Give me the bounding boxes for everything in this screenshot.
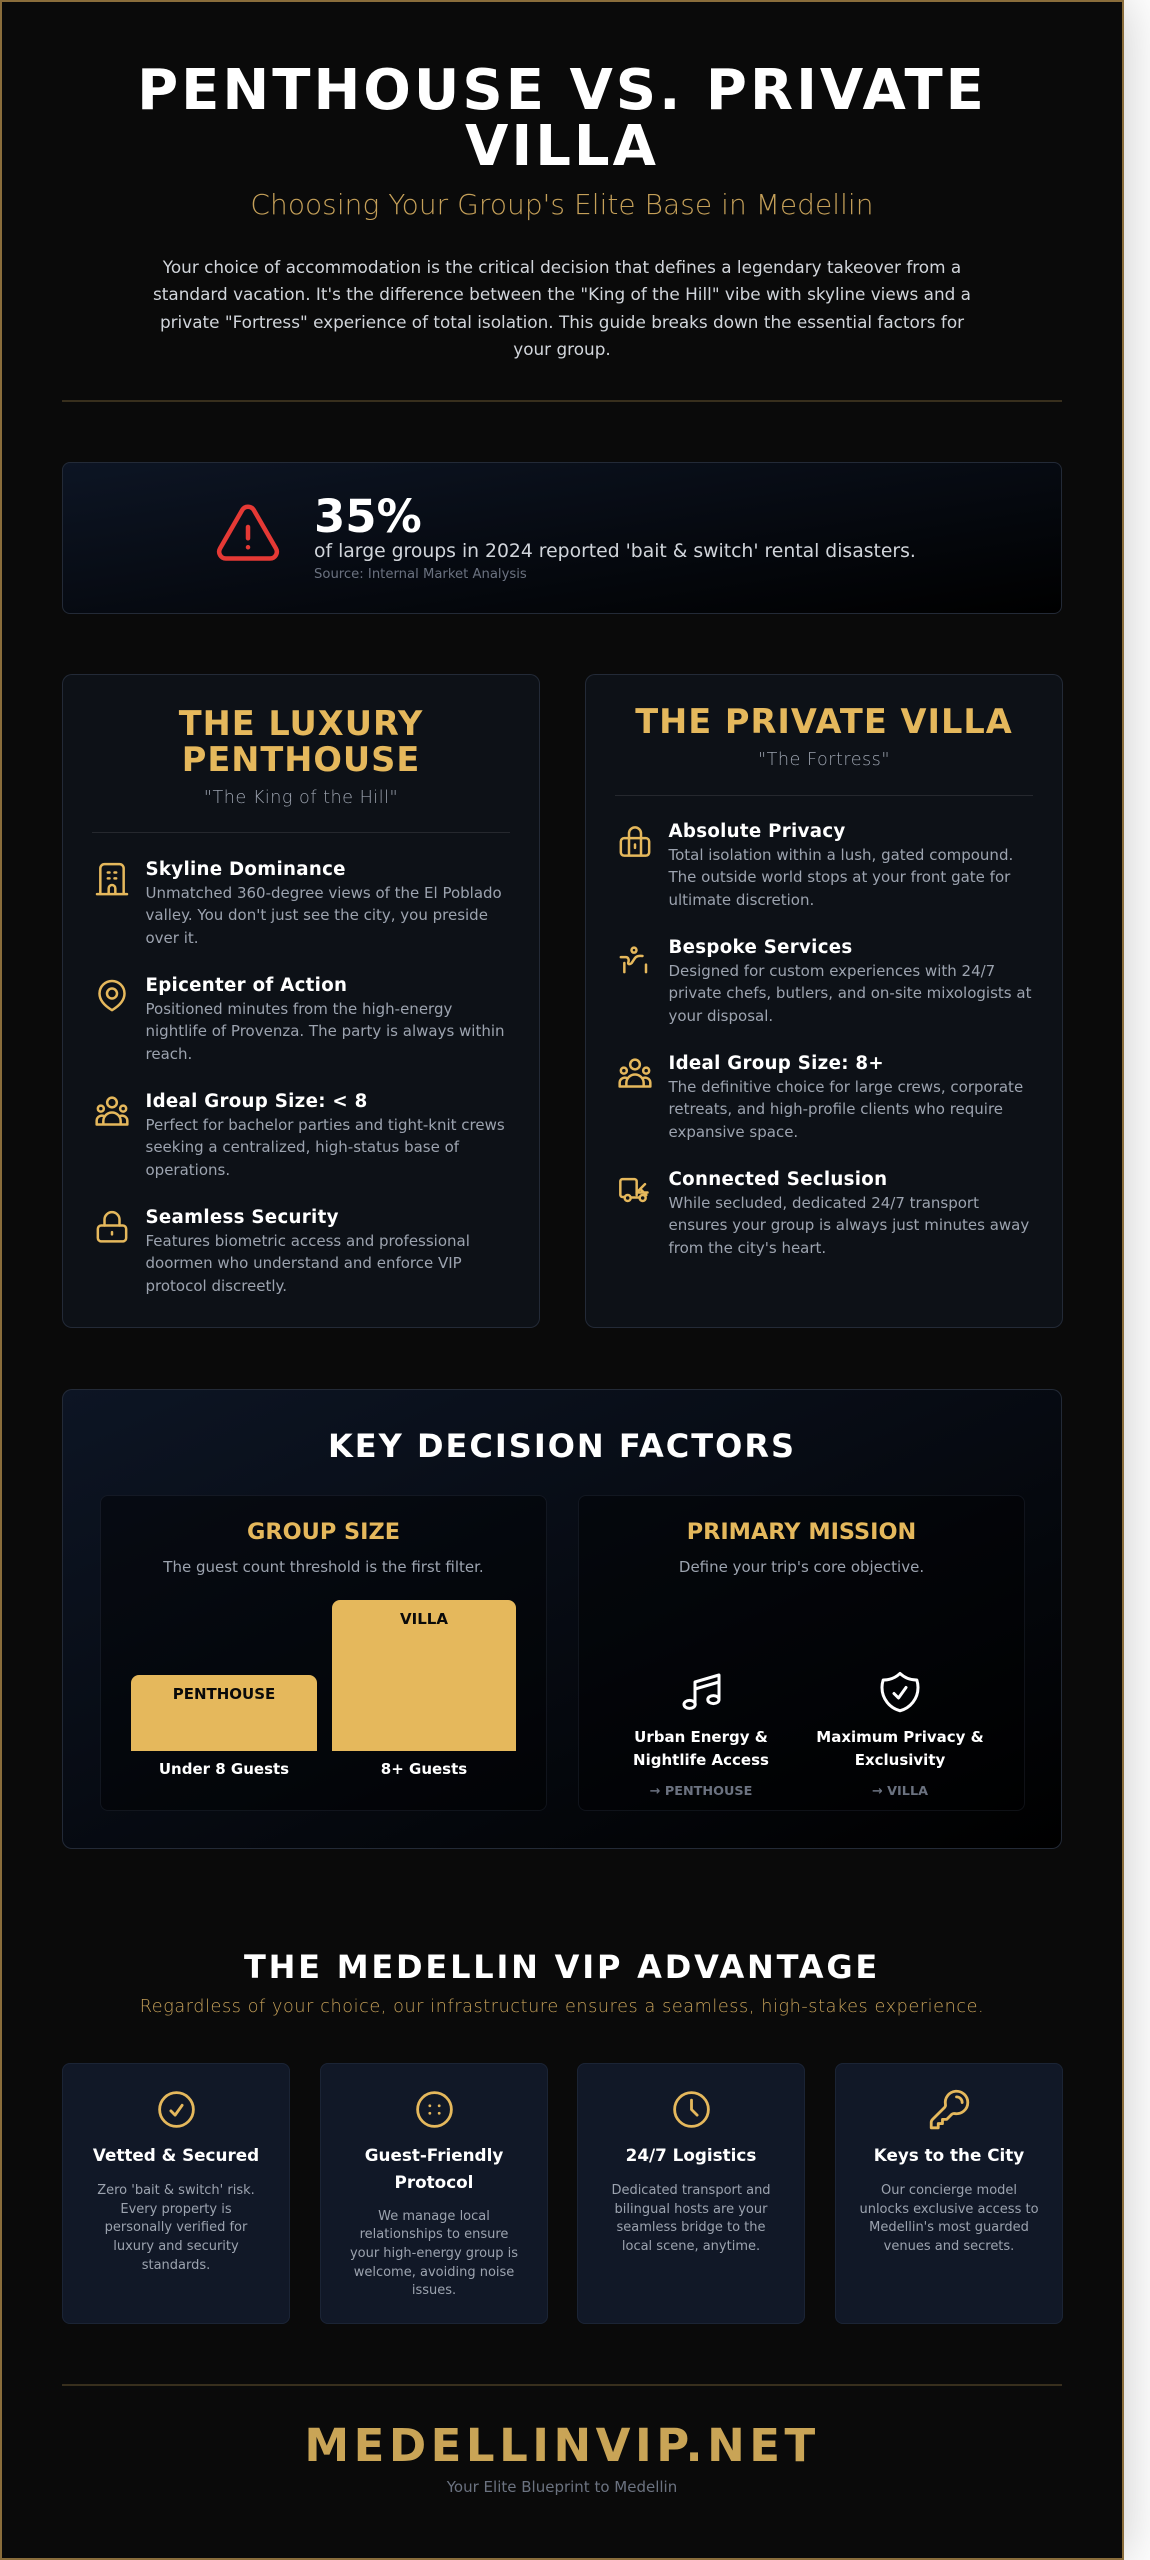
intro text: private "Fortress" experience of total isolation. This guide breaks down the essential factors for	[160, 312, 964, 332]
footer tagline: Your Elite Blueprint to Medellin	[447, 2478, 677, 2496]
card: keys to the city: Our concierge model	[881, 2183, 1017, 2198]
option label	[816, 1728, 984, 1768]
feature: bespoke services: private chefs, butlers, and on-site mixologists at	[668, 984, 1031, 1002]
icon: transport	[619, 1178, 649, 1202]
feature: seamless security	[96, 1206, 470, 1294]
icon: warning triangle	[216, 504, 280, 561]
feature: bespoke services: Bespoke Services	[668, 936, 853, 958]
option result: → PENTHOUSE	[650, 1784, 752, 1799]
bar label: 8 plus guests: 8+ Guests	[381, 1760, 467, 1778]
card: keys to the city: Keys to the City	[874, 2145, 1024, 2165]
option label: Exclusivity	[855, 1750, 945, 1768]
icon: butler service	[620, 946, 648, 974]
feature: ideal group size 8 plus	[618, 1052, 1023, 1140]
statistic source: Source: Internal Market Analysis	[314, 566, 527, 582]
feature: seamless security: Seamless Security	[146, 1206, 339, 1228]
card: vetted and secured: luxury and security	[113, 2239, 239, 2254]
panel: private villa	[585, 674, 1063, 1328]
icon: check circle	[158, 2091, 195, 2128]
card: logistics: bilingual hosts are your	[615, 2202, 767, 2217]
card: vetted and secured	[62, 2063, 290, 2324]
section subtitle: Regardless of your choice, our infrastructure ensures a seamless, high-stakes experience.	[140, 1996, 984, 2016]
option: urban energy	[633, 1674, 769, 1799]
card: guest-friendly protocol: issues.	[412, 2283, 456, 2298]
panel: statistic callout	[62, 462, 1062, 614]
card: guest-friendly protocol: Guest-Friendly	[365, 2145, 503, 2165]
feature: epicenter of action: Positioned minutes from the high-energy	[146, 1000, 452, 1018]
description: Define your trip's core objective.	[679, 1558, 924, 1576]
feature: epicenter of action: reach.	[146, 1044, 192, 1062]
bar: villa: VILLA	[400, 1610, 448, 1628]
card: keys to the city: venues and secrets.	[884, 2239, 1014, 2254]
heading: medellin vip advantage: THE MEDELLIN VIP ADVANTAGE	[244, 1948, 880, 1986]
feature: connected seclusion: from the city's heart.	[668, 1238, 826, 1256]
feature: ideal group size under 8: Ideal Group Size: < 8	[146, 1090, 368, 1112]
panel: group size	[100, 1495, 547, 1811]
statistic number: 35%	[314, 490, 422, 542]
option result: → VILLA	[872, 1784, 928, 1799]
feature: skyline dominance: over it.	[146, 928, 199, 946]
heading: luxury penthouse: PENTHOUSE	[182, 740, 420, 779]
icon: music note	[682, 1674, 720, 1710]
icon: group	[95, 1096, 129, 1126]
feature: ideal group size 8 plus: Ideal Group Size: 8+	[668, 1052, 884, 1074]
feature: absolute privacy	[620, 820, 1013, 908]
icon: map pin	[98, 980, 126, 1012]
title: VILLA	[465, 114, 659, 178]
feature: skyline dominance: valley. You don't just see the city, you preside	[146, 906, 488, 924]
heading: luxury penthouse: THE LUXURY	[179, 704, 423, 743]
feature: absolute privacy: The outside world stops at your front gate for	[668, 868, 1010, 886]
tagline: "The King of the Hill"	[204, 788, 398, 808]
heading: luxury penthouse	[178, 704, 423, 779]
card: logistics: seamless bridge to the	[616, 2220, 766, 2235]
tagline: "The Fortress"	[758, 750, 890, 770]
option: maximum privacy	[816, 1672, 984, 1799]
feature: seamless security: protocol discreetly.	[146, 1276, 287, 1294]
title: PENTHOUSE VS. PRIVATE	[137, 58, 987, 123]
feature: epicenter of action	[98, 974, 505, 1062]
title	[137, 58, 987, 178]
icon: shield check	[880, 1672, 920, 1712]
option label	[633, 1728, 769, 1768]
feature: bespoke services	[620, 936, 1032, 1024]
bar: villa	[332, 1600, 516, 1751]
card: keys to the city	[835, 2063, 1063, 2324]
heading: group size: GROUP SIZE	[247, 1519, 400, 1545]
intro text: Your choice of accommodation is the critical decision that defines a legendary takeover from a	[163, 256, 961, 276]
heading: private villa: THE PRIVATE VILLA	[635, 702, 1013, 741]
heading: primary mission: PRIMARY MISSION	[687, 1519, 916, 1545]
feature: bespoke services: Designed for custom experiences with 24/7	[668, 962, 995, 980]
card: guest-friendly protocol: welcome, avoiding noise	[354, 2265, 514, 2280]
card: keys to the city: Medellin's most guarded	[869, 2220, 1029, 2235]
feature: absolute privacy: ultimate discretion.	[668, 890, 814, 908]
card: logistics: Dedicated transport and	[611, 2183, 771, 2198]
heading: key decision factors: KEY DECISION FACTORS	[328, 1427, 796, 1465]
feature: ideal group size under 8: seeking a centralized, high-status base of	[146, 1138, 459, 1156]
icon: clock	[673, 2091, 710, 2128]
icon: building	[96, 862, 128, 896]
card: vetted and secured: Every property is	[120, 2202, 232, 2217]
bar chart	[131, 1600, 516, 1778]
option label: Urban Energy &	[634, 1728, 768, 1746]
feature: ideal group size 8 plus: retreats, and high-profile clients who require	[668, 1100, 1003, 1118]
card: guest-friendly protocol: Protocol	[395, 2172, 473, 2192]
intro text: your group.	[513, 339, 611, 359]
option label: Maximum Privacy &	[816, 1728, 984, 1746]
feature: ideal group size 8 plus: expansive space.	[668, 1122, 798, 1140]
icon: padlock	[620, 826, 650, 857]
icon: circle with dots	[416, 2091, 453, 2128]
subtitle: Choosing Your Group's Elite Base in Medellin	[250, 188, 874, 221]
panel: primary mission	[578, 1495, 1025, 1811]
icon: group	[618, 1058, 652, 1088]
feature: absolute privacy: Total isolation within a lush, gated compound.	[668, 846, 1013, 864]
card: keys to the city: unlocks exclusive access to	[859, 2202, 1039, 2217]
feature: bespoke services: your disposal.	[668, 1006, 773, 1024]
feature: connected seclusion: While secluded, dedicated 24/7 transport	[668, 1194, 979, 1212]
feature: connected seclusion: Connected Seclusion	[668, 1168, 887, 1190]
card: vetted and secured: Vetted & Secured	[93, 2145, 259, 2165]
feature: ideal group size under 8: operations.	[146, 1160, 230, 1178]
footer brand: MEDELLINVIP.NET	[304, 2418, 820, 2472]
feature: skyline dominance: Unmatched 360-degree views of the El Poblado	[146, 884, 502, 902]
feature: ideal group size 8 plus: The definitive choice for large crews, corporate	[668, 1078, 1023, 1096]
statistic description: of large groups in 2024 reported 'bait & switch' rental disasters.	[314, 541, 916, 562]
card: vetted and secured: personally verified for	[105, 2220, 247, 2235]
feature: absolute privacy: Absolute Privacy	[668, 820, 846, 842]
panel: key decision factors	[62, 1389, 1062, 1849]
feature: skyline dominance: Skyline Dominance	[146, 858, 346, 880]
intro text	[153, 256, 971, 359]
feature: seamless security: Features biometric access and professional	[146, 1232, 470, 1250]
feature: skyline dominance	[96, 858, 502, 946]
feature: epicenter of action: nightlife of Provenza. The party is always within	[146, 1022, 505, 1040]
card: guest-friendly protocol	[320, 2063, 548, 2324]
card: vetted and secured: Zero 'bait & switch' risk.	[97, 2183, 255, 2198]
card: logistics	[577, 2063, 805, 2324]
feature: seamless security: doormen who understand and enforce VIP	[146, 1254, 462, 1272]
icon: key	[930, 2090, 970, 2130]
bar: penthouse	[131, 1675, 317, 1751]
feature: ideal group size under 8	[95, 1090, 505, 1178]
icon: lock	[96, 1210, 128, 1243]
panel: luxury penthouse	[62, 674, 540, 1328]
card: logistics: local scene, anytime.	[622, 2239, 760, 2254]
card: vetted and secured: standards.	[142, 2258, 210, 2273]
feature: connected seclusion	[619, 1168, 1029, 1256]
card: guest-friendly protocol: We manage local	[378, 2208, 490, 2224]
description: The guest count threshold is the first filter.	[163, 1558, 484, 1576]
bar: penthouse: PENTHOUSE	[173, 1685, 275, 1703]
option label: Nightlife Access	[633, 1750, 769, 1768]
feature: epicenter of action: Epicenter of Action	[146, 974, 347, 996]
intro text: standard vacation. It's the difference between the "King of the Hill" vibe with skyline views and a	[153, 284, 971, 304]
bar label: under 8 guests: Under 8 Guests	[159, 1760, 289, 1778]
card: guest-friendly protocol: your high-energy group is	[350, 2246, 518, 2261]
feature: connected seclusion: ensures your group is always just minutes away	[668, 1216, 1029, 1234]
card: logistics: 24/7 Logistics	[626, 2145, 756, 2165]
card: guest-friendly protocol: relationships to ensure	[360, 2227, 508, 2242]
feature: ideal group size under 8: Perfect for bachelor parties and tight-knit crews	[146, 1116, 505, 1134]
